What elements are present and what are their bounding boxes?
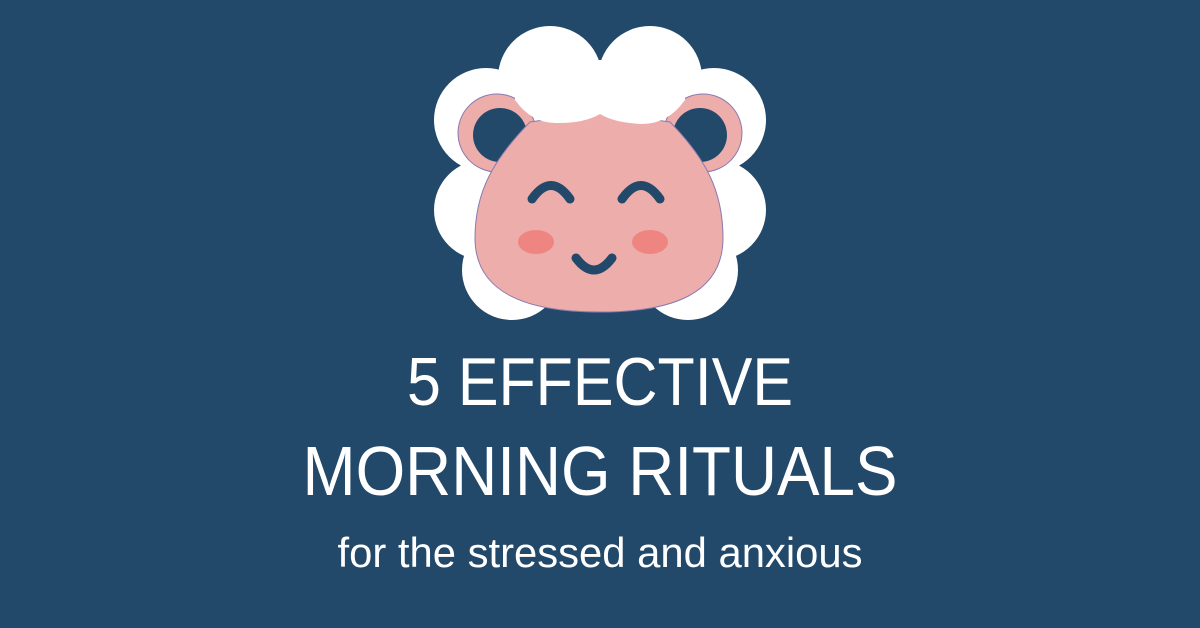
sheep cheeks bbox=[518, 230, 668, 254]
subtitle: for the stressed and anxious bbox=[338, 529, 862, 576]
sheep ears bbox=[458, 94, 742, 172]
title: MORNING RITUALS bbox=[302, 432, 898, 510]
sheep mouth bbox=[576, 258, 612, 270]
sheep bangs bbox=[515, 60, 685, 124]
sheep face bbox=[475, 112, 723, 312]
icon: sheep head bbox=[434, 26, 766, 320]
sheep wool bbox=[434, 26, 766, 320]
title: 5 EFFECTIVE bbox=[407, 344, 793, 420]
title bbox=[302, 344, 898, 510]
sheep eyes bbox=[532, 186, 660, 199]
